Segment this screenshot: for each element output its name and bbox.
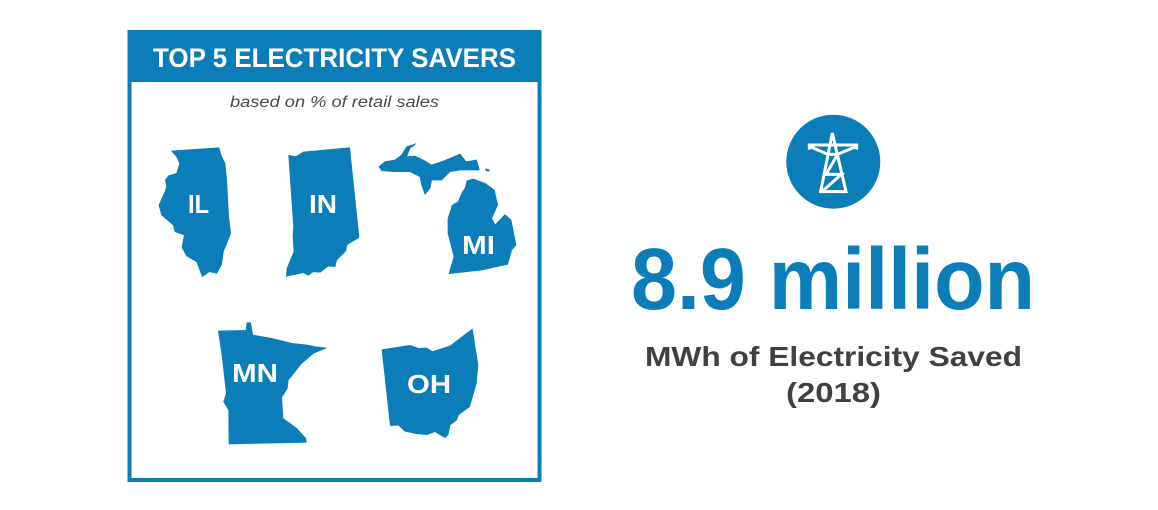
big number: 8.9 million	[631, 231, 1035, 328]
state: Michigan	[379, 144, 516, 274]
state: Indiana: IN	[309, 189, 337, 219]
icon: transmission tower	[786, 115, 880, 209]
caption: (2018)	[786, 377, 881, 408]
state: Ohio: OH	[407, 369, 451, 399]
caption: MWh of Electricity Saved	[645, 341, 1022, 372]
heading: TOP 5 ELECTRICITY SAVERS	[153, 43, 516, 73]
state: Indiana	[286, 148, 359, 276]
state: Ohio	[382, 329, 478, 438]
panel: top 5 electricity savers	[128, 30, 541, 480]
panel frame	[130, 32, 540, 480]
panel header band	[128, 30, 541, 82]
state: Minnesota	[218, 323, 326, 444]
state: Illinois	[159, 148, 231, 277]
state: Minnesota: MN	[232, 358, 278, 388]
state: Michigan: MI	[462, 230, 495, 260]
subheading: based on % of retail sales	[230, 94, 439, 111]
caption	[645, 341, 1022, 408]
state: Illinois: IL	[188, 189, 209, 219]
